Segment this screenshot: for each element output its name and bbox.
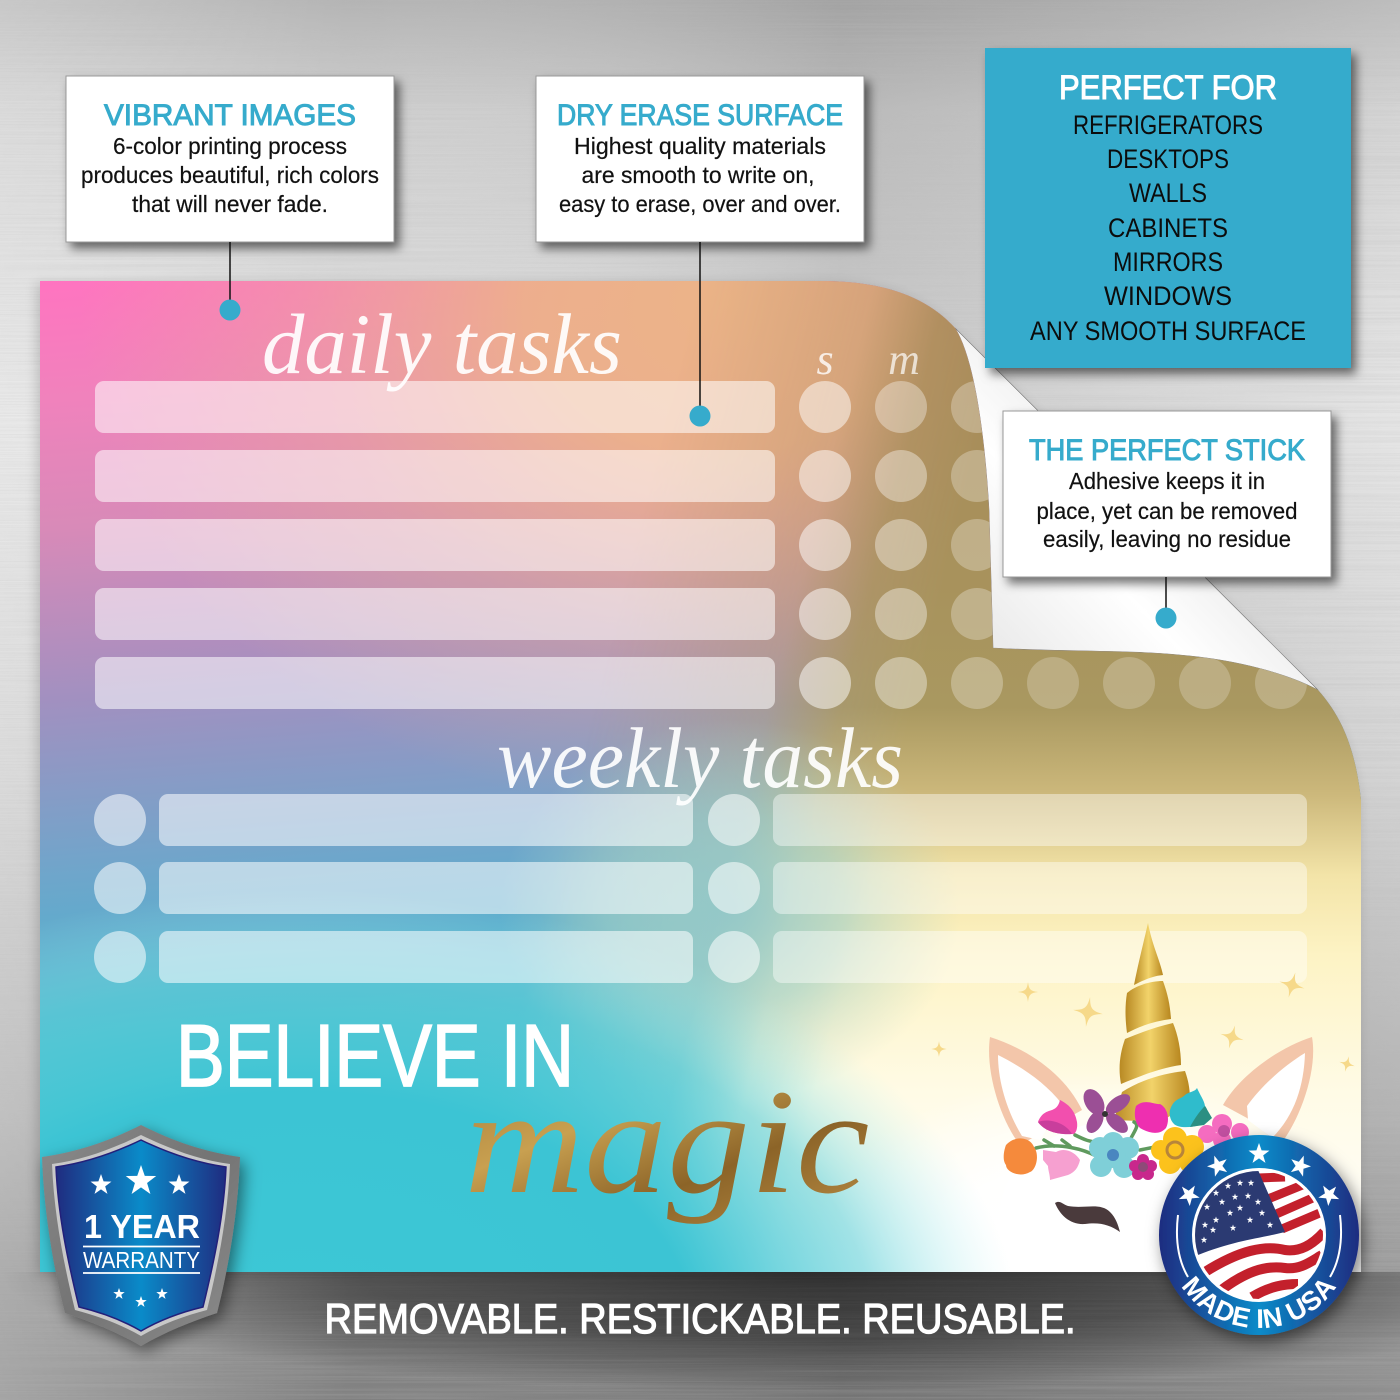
made in usa text: MADE IN USA bbox=[1182, 1276, 1336, 1328]
callout: vibrant images: produces beautiful, rich colors bbox=[81, 162, 379, 188]
surfaces list bbox=[1030, 110, 1306, 346]
gold stars bbox=[931, 969, 1357, 1074]
callout: dry erase surface: are smooth to write on, bbox=[582, 162, 814, 188]
callout: the perfect stick bbox=[1003, 411, 1331, 577]
1 year: 1 YEAR bbox=[84, 1208, 200, 1245]
face highlight bbox=[1077, 1120, 1192, 1136]
made in usa badge bbox=[1152, 1130, 1372, 1350]
callout: vibrant images bbox=[66, 76, 394, 242]
surfaces list: MIRRORS bbox=[1113, 247, 1223, 277]
leader: the perfect stick bbox=[1156, 577, 1176, 628]
flower crown bbox=[1004, 1085, 1249, 1180]
surfaces list: WALLS bbox=[1129, 178, 1207, 208]
callout: dry erase surface: DRY ERASE SURFACE bbox=[557, 99, 843, 132]
day label m: m bbox=[888, 335, 920, 384]
tagline: REMOVABLE. RESTICKABLE. REUSABLE. bbox=[324, 1295, 1076, 1342]
horn bbox=[1114, 923, 1190, 1122]
daily check circles bbox=[799, 381, 1307, 709]
chart sheet bbox=[40, 281, 1361, 1310]
callout: the perfect stick: easily, leaving no residue bbox=[1043, 526, 1291, 552]
warranty rule lines bbox=[83, 1246, 200, 1273]
leader: dry erase surface bbox=[690, 242, 710, 426]
callout: dry erase surface: easy to erase, over and over. bbox=[559, 191, 841, 217]
ears bbox=[989, 1037, 1313, 1145]
panel: perfect for bbox=[985, 48, 1351, 368]
callout: vibrant images: that will never fade. bbox=[132, 191, 328, 217]
badge stars bbox=[1174, 1143, 1344, 1209]
peeled sheet shadow bbox=[40, 281, 1361, 1272]
perfect for heading: PERFECT FOR bbox=[1059, 69, 1277, 107]
surfaces list: ANY SMOOTH SURFACE bbox=[1030, 316, 1306, 346]
magic script: magic bbox=[464, 1059, 870, 1225]
leader: vibrant images bbox=[220, 242, 240, 320]
daily task rows bbox=[95, 381, 775, 709]
eyelash bbox=[1055, 1202, 1120, 1232]
callout: vibrant images: 6-color printing process bbox=[113, 133, 347, 159]
american flag bbox=[1190, 1170, 1330, 1300]
callout: dry erase surface: Highest quality materials bbox=[574, 133, 826, 159]
day label s: s bbox=[816, 335, 834, 384]
surfaces list: CABINETS bbox=[1108, 213, 1228, 243]
weekly tasks heading: weekly tasks bbox=[497, 710, 903, 806]
surfaces list: DESKTOPS bbox=[1107, 144, 1229, 174]
callout: the perfect stick: THE PERFECT STICK bbox=[1029, 434, 1305, 467]
white peeled flap bbox=[955, 328, 1318, 690]
callout: the perfect stick: place, yet can be removed bbox=[1036, 498, 1298, 524]
warranty word: WARRANTY bbox=[83, 1247, 200, 1273]
unicorn illustration bbox=[932, 923, 1354, 1232]
gradient background bbox=[40, 281, 1361, 1272]
weekly task rows bbox=[94, 794, 1307, 983]
daily tasks heading: daily tasks bbox=[262, 296, 622, 392]
surfaces list: REFRIGERATORS bbox=[1073, 110, 1263, 140]
believe in heading: BELIEVE IN bbox=[176, 1006, 574, 1105]
shield stars bbox=[91, 1165, 189, 1307]
callout: the perfect stick: Adhesive keeps it in bbox=[1069, 468, 1265, 494]
surfaces list: WINDOWS bbox=[1104, 281, 1232, 311]
stems bbox=[1036, 1122, 1155, 1156]
warranty shield badge bbox=[42, 1125, 240, 1346]
callout: vibrant images: VIBRANT IMAGES bbox=[104, 99, 356, 132]
callout: dry erase surface bbox=[536, 76, 864, 242]
